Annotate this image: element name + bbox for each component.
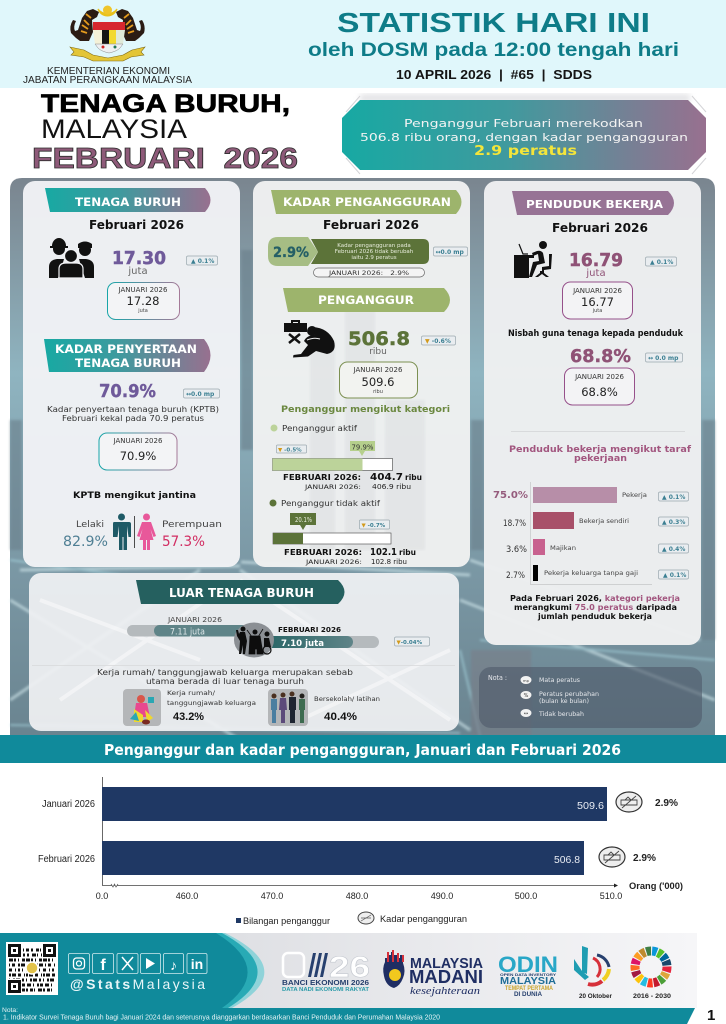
value: 16.79 juta: juta xyxy=(585,268,606,279)
headline banner: Penganggur Februari merekodkan xyxy=(404,117,643,130)
bar: februari: Februari 2026 xyxy=(38,854,95,865)
title: Statistik hari ini: oleh DOSM pada 12:00 tengah hari xyxy=(308,40,679,61)
ribbon: kadar penyertaan: TENAGA BURUH xyxy=(75,356,181,370)
main heading xyxy=(32,90,298,175)
icon: male xyxy=(113,514,131,550)
text: students share xyxy=(314,695,380,723)
text: employment summary: Pada Februari 2026, kategori pekerja xyxy=(510,594,680,603)
callout: unemployment rate: iaitu 2.9 peratus xyxy=(351,255,397,261)
title: Statistik hari ini: 10 APRIL 2026 | #65 | SDDS xyxy=(396,68,592,82)
icon and rate: februari: 2.9% xyxy=(633,852,657,864)
bar: penganggur tidak aktif: Penganggur tidak aktif xyxy=(281,499,380,508)
bar: pekerja: Pekerja xyxy=(622,491,647,499)
social media icons xyxy=(68,954,207,974)
bar: penganggur tidak aktif: 102.8 ribu xyxy=(371,558,407,566)
change badge: ↔0.0 mp xyxy=(436,249,464,256)
bar: januari: Januari 2026 xyxy=(42,799,95,810)
january pill: JANUARI 2026 xyxy=(167,616,223,624)
box: januari 2026: ribu xyxy=(373,389,383,395)
axis labels: 460.0 xyxy=(176,891,198,901)
change badge xyxy=(186,256,218,265)
ribbon: penduduk bekerja: PENDUDUK BEKERJA xyxy=(526,198,664,211)
ribbon: kadar penyertaan xyxy=(44,339,210,372)
box: januari 2026: 509.6 xyxy=(362,375,394,389)
box: januari 2026 xyxy=(340,362,418,398)
legend: nota: mp xyxy=(523,679,530,683)
box: januari 2026: JANUARI 2026 xyxy=(118,286,168,294)
panel: kadar pengangguran xyxy=(253,181,470,567)
footnote strip xyxy=(0,1007,695,1024)
text: housework share xyxy=(167,689,256,723)
icon and rate: februari xyxy=(599,847,657,867)
ribbon: kadar penyertaan: KADAR PENYERTAAN xyxy=(55,342,197,356)
social media icons: ♪ xyxy=(170,957,177,973)
icon: students xyxy=(268,689,308,726)
bar: pekerja keluarga: Pekerja keluarga tanpa gaji xyxy=(544,569,638,577)
legend: nota: Tidak berubah xyxy=(538,710,584,718)
box: januari 2026: JANUARI 2026 xyxy=(113,437,163,445)
logo: malaysia madani: MADANI xyxy=(409,967,483,987)
callout: unemployment rate: 2.9% xyxy=(273,245,309,261)
bar: penganggur aktif: 404.7 xyxy=(370,472,403,483)
bar: majikan: 3.6% xyxy=(506,545,527,555)
icon: female xyxy=(137,514,156,550)
box: januari 2026: 70.9% xyxy=(120,449,156,463)
box: januari 2026 xyxy=(108,282,180,320)
bar chart: unemployed persons xyxy=(38,777,683,927)
text: students share: Bersekolah/ latihan xyxy=(314,695,380,703)
bar: pekerja keluarga: 2.7% xyxy=(506,571,525,581)
main heading: FEBRUARI 2026 xyxy=(32,143,298,175)
bar: penganggur aktif: JANUARI 2026: xyxy=(304,483,361,491)
chart legend: Bilangan penganggur xyxy=(243,916,330,927)
logo: banci ekonomi 2026 xyxy=(282,951,370,993)
logo: sdg wheel: 2016 - 2030 xyxy=(633,993,671,1000)
value: 506.8 ribu: 506.8 xyxy=(348,328,410,350)
box: januari 2026: 16.77 xyxy=(581,295,614,309)
bar: penganggur aktif: ▼ -0.5% xyxy=(278,448,302,454)
text: kptb description xyxy=(47,405,219,423)
panel: penduduk bekerja xyxy=(484,181,701,645)
box: januari 2026: JANUARI 2026 xyxy=(353,366,403,374)
ribbon: penganggur xyxy=(283,288,450,312)
february pill: FEBRUARI 2026 xyxy=(278,626,341,634)
logo: odin: MALAYSIA xyxy=(500,975,556,987)
box: januari 2026 xyxy=(99,433,177,470)
footer band xyxy=(0,933,697,1008)
logo: odin xyxy=(498,952,558,998)
bar: pekerja xyxy=(493,487,688,503)
bar: februari: 506.8 xyxy=(554,855,580,866)
bar: penganggur aktif: 406.9 ribu xyxy=(372,483,411,491)
icon: coat of arms xyxy=(70,6,145,61)
main heading: MALAYSIA xyxy=(41,114,187,144)
bar: majikan xyxy=(506,539,688,555)
date heading: Februari 2026 xyxy=(89,217,184,232)
divider xyxy=(134,516,136,548)
axis labels: 0.0 xyxy=(96,891,108,901)
box: januari 2026: 68.8% xyxy=(581,385,618,399)
ribbon: luar tenaga buruh: LUAR TENAGA BURUH xyxy=(169,586,314,600)
january pill xyxy=(127,616,252,638)
pill: januari 2026: JANUARI 2026: 2.9% xyxy=(328,269,409,277)
bar: penganggur tidak aktif: 102.1 xyxy=(370,547,397,558)
male rate: 82.9% xyxy=(63,534,108,550)
icon: people outside the labour force xyxy=(234,622,274,658)
bar: penganggur tidak aktif xyxy=(270,499,416,566)
icon: workers xyxy=(49,238,94,278)
value: 68.8%: 68.8% xyxy=(570,347,631,367)
female rate xyxy=(162,520,222,550)
value: 16.79 juta xyxy=(569,250,623,279)
axis labels: 470.0 xyxy=(261,891,283,901)
chart legend: Kadar pengangguran xyxy=(380,914,467,925)
box: januari 2026: JANUARI 2026 xyxy=(574,373,624,381)
date heading: Februari 2026 xyxy=(323,217,419,232)
text: housework share: 43.2% xyxy=(173,711,204,723)
bar: januari: 509.6 xyxy=(577,801,604,812)
change badge xyxy=(184,389,220,398)
box: januari 2026 xyxy=(564,368,634,405)
bar: penganggur tidak aktif: 20.1% xyxy=(295,516,312,524)
title: Statistik hari ini: STATISTIK HARI INI xyxy=(337,7,650,38)
logo: malaysia madani: MALAYSIA xyxy=(410,955,483,972)
logo: malaysia madani xyxy=(383,950,483,997)
ribbon: kadar pengangguran xyxy=(271,190,462,214)
bar: majikan: Majikan xyxy=(550,544,576,552)
logo: odin: ODIN xyxy=(498,952,558,977)
bar: bekerja sendiri: 18.7% xyxy=(503,519,526,529)
bar: bekerja sendiri xyxy=(503,512,688,529)
icon: office worker xyxy=(514,241,552,278)
header band xyxy=(0,0,726,88)
change badge xyxy=(646,353,682,362)
legend: nota: Peratus perubahan xyxy=(539,690,599,698)
logo: odin: DI DUNIA xyxy=(514,992,543,998)
icon: left tiger xyxy=(70,9,99,41)
axis labels: 510.0 xyxy=(600,891,622,901)
text: housework share: tanggungjawab keluarga xyxy=(167,699,256,707)
title: Statistik hari ini xyxy=(308,7,679,82)
female rate: 57.3% xyxy=(162,534,205,550)
callout: unemployment rate xyxy=(268,237,429,266)
page number: 1 xyxy=(707,1007,715,1024)
legend: nota: ↔ xyxy=(524,711,528,717)
february pill: 7.10 juta xyxy=(281,639,324,649)
axis labels: 490.0 xyxy=(431,891,453,901)
legend: nota xyxy=(479,667,702,728)
subheading: employment status: pekerjaan xyxy=(574,454,627,464)
bar: bekerja sendiri: ▲ 0.3% xyxy=(662,519,685,526)
bar chart: employment status xyxy=(493,482,688,584)
bar: penganggur aktif: 79.9% xyxy=(352,444,374,452)
logo: odin: OPEN DATA INVENTORY xyxy=(500,973,557,977)
background panel with city image xyxy=(10,178,715,740)
change badge: ▲ 0.1% xyxy=(650,259,673,266)
text: employment summary: merangkumi 75.0 peratus daripada xyxy=(514,603,677,612)
text: employment summary: jumlah penduduk bekerja xyxy=(537,612,652,621)
logo: world statistics day: 20 Oktober xyxy=(579,993,612,1000)
logo: banci ekonomi 2026: BANCI EKONOMI 2026 xyxy=(282,978,369,987)
text: housework share: Kerja rumah/ xyxy=(167,689,216,697)
ribbon: luar tenaga buruh xyxy=(136,580,344,604)
value: 506.8 ribu: ribu xyxy=(369,347,387,357)
icon and rate: januari: 2.9% xyxy=(655,797,679,809)
bar: penganggur aktif: ribu xyxy=(405,473,422,482)
social handle: @StatsMalaysia xyxy=(70,976,205,992)
social media icons: in xyxy=(191,956,203,972)
subheading: employment status xyxy=(509,445,691,464)
date heading: Februari 2026 xyxy=(552,220,648,235)
value: 17.30 juta: juta xyxy=(127,266,148,277)
logo: world statistics day xyxy=(574,946,612,1000)
bar: penganggur tidak aktif: JANUARI 2026: xyxy=(305,558,362,566)
legend: nota: Mata peratus xyxy=(539,676,581,684)
legend: nota: (bulan ke bulan) xyxy=(539,697,589,705)
text: kptb description: Februari kekal pada 70.9 peratus xyxy=(62,414,204,423)
bar: januari xyxy=(42,787,607,821)
subheading: kptb by gender: KPTB mengikut jantina xyxy=(73,491,196,501)
bar: majikan: ▲ 0.4% xyxy=(662,546,685,553)
subheading: employment status: Penduduk bekerja mengikut taraf xyxy=(509,445,691,455)
february pill xyxy=(262,626,379,649)
bar: bekerja sendiri: Bekerja sendiri xyxy=(579,517,629,525)
bar: penganggur aktif xyxy=(270,424,422,491)
icon: housework xyxy=(123,689,161,726)
text: kptb description: Kadar penyertaan tenaga buruh (KPTB) xyxy=(47,405,219,414)
logo: malaysia madani: kesejahteraan xyxy=(410,985,481,997)
bar: penganggur tidak aktif: ▼ -0.7% xyxy=(362,523,386,529)
axis labels: 500.0 xyxy=(515,891,537,901)
bar: februari xyxy=(38,841,584,875)
text: employment summary xyxy=(510,594,680,621)
change badge xyxy=(394,637,430,646)
logo: banci ekonomi 2026: DATA NADI EKONOMI RAKYAT xyxy=(282,987,370,993)
text: main reason: utama berada di luar tenaga buruh xyxy=(146,677,304,686)
female rate: Perempuan xyxy=(162,520,222,530)
callout: unemployment rate: Kadar pengangguran pada xyxy=(337,243,411,249)
ministry name: JABATAN PERANGKAAN MALAYSIA xyxy=(23,75,192,86)
main heading: TENAGA BURUH, xyxy=(41,90,290,118)
headline banner xyxy=(342,94,706,174)
axis labels: Orang ('000) xyxy=(629,881,683,892)
pill: januari 2026 xyxy=(314,268,424,277)
axis labels xyxy=(96,881,683,901)
value: 17.30 juta xyxy=(112,248,166,277)
ribbon: tenaga buruh xyxy=(45,188,210,212)
ribbon: kadar pengangguran: KADAR PENGANGGURAN xyxy=(283,195,451,209)
bar: pekerja keluarga: ▲ 0.1% xyxy=(663,572,686,579)
bar: penganggur tidak aktif: FEBRUARI 2026: xyxy=(284,548,362,557)
bar: pekerja: ▲ 0.1% xyxy=(662,494,685,501)
logo: odin: TEMPAT PERTAMA xyxy=(505,986,554,992)
logo: banci ekonomi 2026: 26 xyxy=(329,951,370,984)
ribbon: penganggur: PENGANGGUR xyxy=(318,293,414,307)
icon and rate: januari xyxy=(616,792,679,812)
icon: unemployed person xyxy=(284,320,335,358)
text: main reason xyxy=(97,668,353,686)
change badge: ↔ 0.0 mp xyxy=(648,355,679,362)
headline banner: 506.8 ribu orang, dengan kadar pengangguran xyxy=(360,131,688,144)
change badge xyxy=(434,247,468,256)
social media icons: f xyxy=(100,957,106,974)
chart title band: Penganggur dan kadar pengangguran, Januari dan Februari 2026 xyxy=(104,741,621,759)
callout: unemployment rate: Februari 2026 tidak berubah xyxy=(335,249,414,255)
box: januari 2026: 17.28 xyxy=(127,294,159,308)
icon: right tiger xyxy=(116,9,145,41)
change badge xyxy=(646,257,676,266)
headline banner: 2.9 peratus xyxy=(474,144,577,159)
value: 17.30 juta: 17.30 xyxy=(112,248,166,269)
ribbon: tenaga buruh: TENAGA BURUH xyxy=(75,195,181,209)
january pill: 7.11 juta xyxy=(170,628,205,638)
legend: nota: Nota : xyxy=(488,674,507,682)
qr code xyxy=(6,942,58,995)
value: 16.79 juta: 16.79 xyxy=(569,250,623,271)
ministry name: KEMENTERIAN EKONOMI xyxy=(47,66,170,77)
change badge: ▲ 0.1% xyxy=(191,258,214,265)
logo: sdg wheel xyxy=(633,951,671,1000)
text: main reason: Kerja rumah/ tanggungjawab keluarga merupakan sebab xyxy=(97,668,353,677)
bar: penganggur aktif: FEBRUARI 2026: xyxy=(283,473,361,482)
ribbon: penduduk bekerja xyxy=(512,191,674,215)
change badge: ↔0.0 mp xyxy=(186,391,215,398)
axis labels: 480.0 xyxy=(346,891,368,901)
chart title band xyxy=(0,735,726,763)
bar: pekerja keluarga xyxy=(506,565,688,581)
bar: penganggur aktif: Penganggur aktif xyxy=(282,424,357,433)
panel: luar tenaga buruh xyxy=(29,573,459,731)
bar: penganggur tidak aktif: ribu xyxy=(399,548,416,557)
box: januari 2026: juta xyxy=(592,308,602,314)
ministry name xyxy=(23,66,192,86)
subheading: penganggur by category: Penganggur mengikut kategori xyxy=(281,405,450,415)
change badge: ▼ -0.6% xyxy=(425,338,451,345)
footnote strip: Nota: xyxy=(2,1007,18,1014)
change badge: ▼-0.04% xyxy=(396,640,423,646)
box: januari 2026: juta xyxy=(137,308,148,314)
subheading: employment ratio: Nisbah guna tenaga kepada penduduk xyxy=(508,329,683,339)
male rate xyxy=(63,520,108,550)
bar: pekerja: 75.0% xyxy=(493,490,528,501)
chart legend xyxy=(236,912,467,927)
change badge xyxy=(422,336,456,345)
male rate: Lelaki xyxy=(76,520,104,530)
text: students share: 40.4% xyxy=(324,711,357,723)
value: 70.9%: 70.9% xyxy=(99,382,156,402)
box: januari 2026: JANUARI 2026 xyxy=(572,287,622,295)
panel: tenaga buruh xyxy=(23,181,240,567)
box: januari 2026 xyxy=(562,282,632,319)
legend: nota: % xyxy=(524,693,529,699)
footnote strip: 1. Indikator Survei Tenaga Buruh bagi Januari 2024 dan seterusnya dianggarkan berdasarkan Banci Penduduk dan Perumahan Malaysia 2020 xyxy=(3,1014,440,1022)
